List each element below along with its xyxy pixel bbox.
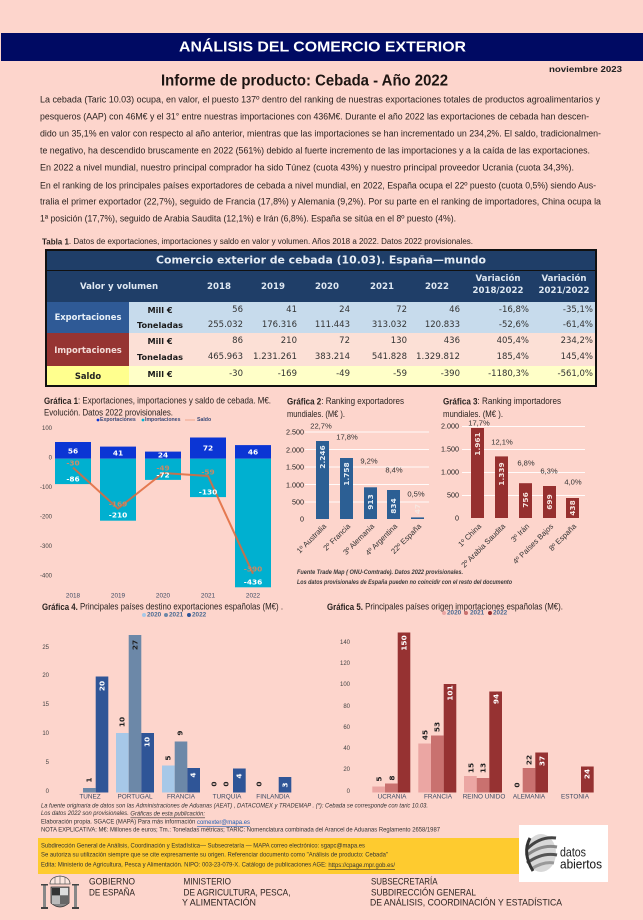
chart 5 categories: ALEMANIA: [513, 794, 546, 800]
ministry label: MINISTERIO: [184, 876, 231, 888]
chart 3 y axis: [441, 422, 459, 522]
footnotes: Los datos 2022 son provisionales. Gráficas de esta publicación:: [41, 810, 205, 817]
chart 1 balance values: -169: [109, 500, 127, 508]
chart 4 y axis: 20: [42, 673, 50, 679]
chart 5 values: 13: [478, 763, 488, 773]
chart 2 categories: 2º Francia: [321, 521, 353, 553]
chart 3 y axis: 1.500: [441, 444, 459, 454]
chart 3 values: 756: [521, 492, 530, 508]
row group: exportaciones: Exportaciones: [55, 312, 121, 322]
chart 5 legend: 2021: [470, 610, 485, 616]
government label: [89, 876, 135, 898]
chart 1 bar values: [66, 444, 262, 586]
chart 4 y axis: 0: [46, 789, 50, 795]
shield: [51, 887, 69, 907]
table header row: 2021/2022: [539, 286, 590, 296]
table header row: 2019: [261, 282, 285, 292]
chart 5 y axis: 0: [347, 789, 351, 795]
chart 3 grid: [462, 426, 585, 496]
chart 3 y axis: 0: [455, 514, 459, 522]
chart 4 bars: [83, 635, 291, 792]
chart 1 balance values: -390: [244, 564, 262, 574]
undersecretariat label: SUBSECRETARÍA: [371, 876, 438, 888]
chart 1 bar values: 56: [68, 446, 78, 456]
chart 2 y axis: 1.000: [286, 480, 304, 490]
chart 5 values: 0: [512, 782, 522, 788]
chart 2 values: 47: [413, 504, 422, 514]
chart 1 legend: Saldo: [197, 417, 211, 423]
row group: importaciones: 405,4%: [497, 336, 529, 346]
chart 1 categories: [66, 592, 261, 600]
chart 1 balance values: [66, 458, 262, 574]
chart 2 y axis: 500: [292, 498, 304, 506]
intro text block: En 2022 a nivel mundial, nuestro principal comprador ha sido Túnez (cuota 43%) y nuestro principal proveedor Ucrania (cuota 34,3%).: [40, 162, 574, 174]
chart 1 balance line: [73, 468, 253, 574]
chart 4 values: 20: [98, 681, 106, 691]
chart 4 values: 0: [222, 781, 230, 787]
chart 5 legend: 2022: [493, 610, 508, 616]
chart 4 values: 10: [142, 737, 152, 747]
chart 3 bars: [471, 428, 579, 518]
chart 3 values: 1.339: [497, 462, 506, 486]
source note: [297, 570, 512, 586]
chart 5 values: [374, 635, 592, 788]
table header row: Variación: [475, 273, 521, 284]
chart 2 shares: 8,4%: [385, 466, 403, 474]
chart 1 bar values: -86: [66, 474, 80, 484]
government label: DE ESPAÑA: [89, 888, 135, 898]
source note: Fuente Trade Map ( ONU-Comtrade). Datos 2022 provisionales.: [297, 570, 463, 576]
chart 1 categories: 2019: [111, 592, 126, 600]
icon: datos abiertos logo: [519, 825, 608, 882]
undersecretariat label: SUBDIRECCIÓN GENERAL: [371, 888, 477, 898]
chart 5 values: 24: [582, 769, 592, 779]
yellow credits box: Subdirección General de Análisis, Coordinación y Estadística— Subsecretaría — MAPA correo electrónico: sgapc@mapa.es: [41, 842, 365, 850]
chart 4 categories: FRANCIA: [167, 794, 196, 800]
chart 4 legend: [142, 612, 207, 618]
chart 2 categories: 1º Australia: [295, 521, 329, 555]
chart 1 bar values: -210: [109, 510, 127, 520]
chart 4 categories: TURQUIA: [213, 794, 242, 800]
row group: exportaciones: 56: [232, 305, 243, 315]
chart 2 shares: 17,8%: [336, 432, 358, 442]
chart 4 y axis: 15: [42, 702, 50, 708]
footnotes: NOTA EXPLICATIVA: M€: Millones de euros; Tm.: Toneladas métricas; TARIC: Nomenclatura combinada del Arancel de Aduanas Reglamento 2658/1987: [41, 826, 441, 834]
government label: GOBIERNO: [89, 876, 135, 888]
chart 3 y axis: 1.000: [441, 468, 459, 476]
chart 4: export destinations: [42, 612, 291, 800]
row group: importaciones: 130: [391, 336, 407, 346]
icon: datos abiertos logo: abiertos: [560, 856, 602, 872]
chart 2 values: 834: [389, 498, 398, 514]
chart 4 values: 4: [234, 773, 244, 779]
row group: exportaciones: [55, 305, 593, 330]
chart 3 categories: 4º Países Bajos: [511, 522, 555, 566]
table header row: [80, 273, 590, 296]
chart 1 bars: [55, 438, 271, 587]
intro text block: dido un 35,1% en valor con respecto al año anterior, mientras que las importaciones se han incrementado un 234,2%. El saldo, tradicionalmen-: [40, 128, 601, 140]
chart 4 values: 27: [130, 640, 140, 650]
chart 5 y axis: 100: [340, 682, 351, 688]
row group: importaciones: 234,2%: [561, 336, 593, 346]
yellow credits box: Se autoriza su utilización siempre que se cite expresamente su origen. Referenciar documento como "Análisis de producto: Cebada": [41, 852, 388, 858]
chart 5 values: 37: [538, 756, 546, 766]
source note: Los datos provisionales de España pueden no coincidir con el resto del documento: [297, 580, 512, 586]
chart 5 legend: 2020: [447, 610, 462, 616]
chart 1 bar values: -72: [156, 470, 170, 480]
row group: importaciones: 185,4%: [497, 352, 529, 362]
chart 5 y axis: 140: [340, 640, 351, 646]
chart 2 categories: 22º España: [389, 521, 424, 556]
chart 1 heading: Evolución. Datos 2022 provisionales.: [44, 406, 173, 418]
chart 1 y axis: -100: [40, 485, 53, 491]
chart 1 y axis: 0: [49, 456, 53, 462]
table: foreign trade: [45, 249, 597, 387]
chart 3 categories: 3º Irán: [509, 522, 531, 544]
chart 2 categories: [295, 521, 424, 557]
row group: saldo: -59: [393, 369, 407, 379]
footnotes: Elaboración propia. SGACE (MAPA) Para más información comexter@mapa.es: [41, 818, 250, 826]
chart 2 bars: [316, 441, 424, 519]
chart 1 balance values: -59: [201, 468, 215, 476]
table caption: Tabla 1. Datos de exportaciones, importaciones y saldo en valor y volumen. Años 2018 a 2022. Datos 2022 provisionales.: [42, 237, 473, 246]
chart 4 y axis: 10: [42, 731, 50, 737]
row group: exportaciones: Mill €: [147, 305, 173, 315]
table header row: 2021: [370, 282, 394, 292]
chart 2 values: [318, 445, 422, 514]
chart 5 values: 15: [466, 763, 476, 773]
chart 5 y axis: 20: [343, 767, 351, 773]
chart 2 heading: Gráfica 2: Ranking exportadores: [287, 395, 404, 406]
chart 3 values: 1.961: [473, 432, 482, 456]
chart 5 values: 53: [432, 722, 442, 732]
row group: importaciones: 465.963: [208, 352, 243, 362]
chart 1 bar values: -130: [199, 488, 217, 496]
row group: saldo: -169: [278, 369, 297, 379]
intro text block: te negativo, ha descendido bruscamente en 2022 (561%) debido al fuerte incremento de las importaciones y a la caída de las exportaciones.: [40, 146, 590, 156]
yellow credits box: Edita: Ministerio de Agricultura, Pesca y Alimentación. NIPO: 003-23-079-X. Catálogo de publicaciones AGE: https://cpage.mpr.gob.es/: [41, 862, 395, 868]
chart 3 shares: 4,0%: [564, 478, 582, 486]
table header row: Valor y volumen: [80, 282, 158, 292]
chart 4 values: 1: [84, 777, 94, 783]
chart 5 values: 150: [400, 635, 408, 651]
chart 5 y axis: 60: [343, 725, 351, 731]
chart 4 values: [84, 640, 290, 788]
row group: importaciones: 1.231.261: [253, 352, 297, 362]
row group: exportaciones: -16,8%: [499, 305, 529, 315]
chart 1 y axis: -300: [40, 544, 53, 550]
chart 2 values: 2.246: [318, 445, 327, 469]
chart 5 y axis: 40: [343, 746, 351, 752]
chart 1 y axis: [40, 426, 53, 580]
intro text block: 1ª posición (17,7%), seguido de Arabia Saudita (12,1%) e Irán (6,8%). España se sitúa en el 8º puesto (4%).: [40, 214, 456, 224]
row group: saldo: -1180,3%: [488, 369, 529, 379]
footnotes: La fuente originaria de datos son las Administraciones de Aduanas (AEAT) , DATACOMEX y TRADEMAP . (*): Cebada se corresponde con taric 10.03.: [41, 802, 428, 810]
row group: exportaciones: 46: [449, 305, 460, 315]
header band: [1, 33, 643, 61]
chart 4 values: 0: [210, 781, 218, 787]
icon: datos abiertos logo: datos: [560, 844, 586, 860]
chart 1 bar values: 46: [248, 448, 258, 456]
chart 1 legend: Importaciones: [145, 417, 181, 423]
chart 1 balance values: -30: [66, 458, 80, 468]
chart 5 values: 94: [492, 694, 500, 704]
chart 1 bar values: 24: [158, 450, 168, 460]
chart 1 categories: 2020: [156, 592, 171, 600]
chart 4 legend: 2020: [147, 612, 162, 618]
row group: saldo: Saldo: [75, 371, 101, 381]
row group: importaciones: 436: [444, 336, 460, 346]
chart 1: exports, imports and balance: [40, 417, 271, 600]
chart 5 y axis: [340, 640, 351, 795]
chart 5 values: 22: [524, 755, 534, 765]
row group: saldo: Mill €: [147, 369, 173, 379]
chart 1 y axis: -200: [40, 515, 53, 521]
chart 2 heading: [287, 395, 404, 419]
chart 3 shares: 6,8%: [517, 458, 535, 468]
chart 2 y axis: [286, 428, 304, 524]
table title: Comercio exterior de cebada (10.03). España—mundo: [156, 254, 486, 266]
chart 3 values: 699: [545, 494, 554, 510]
table header row: Variación: [541, 273, 587, 284]
row group: importaciones: 210: [281, 336, 297, 346]
chart 5 categories: UCRANIA: [378, 794, 407, 800]
row group: saldo: -49: [336, 369, 350, 379]
chart 3 categories: [456, 521, 579, 570]
chart 3 categories: 2º Arabia Saudita: [459, 521, 508, 570]
chart 1 balance values: -49: [156, 464, 170, 472]
chart 1 legend: Exportaciones: [100, 417, 136, 423]
chart 4 values: 4: [188, 772, 198, 778]
chart 3 heading: Gráfica 3: Ranking importadores: [443, 395, 561, 406]
chart 1 bar values: 41: [113, 448, 123, 458]
chart 5 values: 45: [420, 730, 430, 740]
row group: exportaciones: -61,4%: [563, 320, 593, 330]
chart 5 values: 101: [446, 685, 454, 701]
chart 4 categories: FINLANDIA: [256, 794, 290, 800]
intro text block: [40, 94, 602, 224]
chart 5 heading: Gráfica 5. Principales países origen importaciones españolas (M€).: [327, 600, 563, 612]
chart 2 categories: 4º Argentina: [364, 521, 400, 557]
intro text block: tralia el primer exportador (22,7%), seguido de Francia (17,8%) y Alemania (9,2%). Por su parte en el ranking de importadores, China ocupa la: [40, 196, 602, 208]
chart 2 y axis: 2.000: [286, 446, 304, 454]
chart 2 values: 1.758: [342, 462, 351, 486]
icon: globe: [526, 834, 557, 872]
chart 4 legend: 2021: [169, 612, 184, 618]
yellow credits box: [38, 838, 520, 874]
ministry label: Y ALIMENTACIÓN: [182, 898, 256, 908]
row group: exportaciones: -52,6%: [499, 320, 529, 330]
chart 2 y axis: 2.500: [286, 428, 304, 436]
chart 1 bar values: 72: [203, 444, 213, 452]
chart 4 values: 3: [280, 782, 290, 788]
header band: ANÁLISIS DEL COMERCIO EXTERIOR: [179, 38, 466, 56]
chart 3 shares: 12,1%: [491, 438, 513, 446]
report title: Informe de producto: Cebada - Año 2022: [161, 72, 448, 90]
row group: saldo: -390: [441, 369, 460, 379]
row group: exportaciones: Toneladas: [137, 320, 183, 330]
chart 1 heading: Gráfica 1: Exportaciones, importaciones y saldo de cebada. M€.: [44, 394, 271, 406]
chart 5 legend: [442, 610, 508, 616]
icon: coat of arms of Spain: [41, 876, 79, 909]
undersecretariat label: [370, 876, 563, 908]
chart 3 categories: 8º España: [547, 521, 579, 553]
chart 3 values: 438: [568, 500, 577, 516]
chart 1 categories: 2018: [66, 592, 81, 600]
row group: exportaciones: 313.032: [372, 320, 407, 330]
row group: importaciones: 1.329.812: [416, 352, 460, 362]
chart 5 categories: [378, 794, 590, 800]
chart 4 values: 10: [118, 717, 126, 727]
table header row: 2018/2022: [473, 286, 524, 296]
row group: importaciones: 86: [232, 336, 243, 346]
chart 4 y axis: 25: [42, 645, 50, 651]
chart 2 grid: [305, 432, 429, 502]
row group: importaciones: Toneladas: [137, 352, 183, 362]
chart 3 shares: 6,3%: [540, 466, 558, 476]
chart 4 values: 9: [176, 730, 184, 736]
row group: importaciones: Importaciones: [54, 345, 122, 355]
chart 5: import origins: [340, 610, 594, 800]
chart 4 values: 0: [254, 781, 264, 787]
chart 3 shares: [468, 418, 582, 486]
row group: exportaciones: 72: [396, 305, 407, 315]
row group: saldo: -30: [229, 369, 243, 379]
row group: importaciones: 541.828: [372, 352, 407, 362]
chart 3: world importers ranking: [441, 418, 585, 570]
undersecretariat label: DE ANÁLISIS, COORDINACIÓN Y ESTADÍSTICA: [370, 898, 563, 908]
chart 1 categories: 2021: [201, 592, 216, 600]
row group: exportaciones: 176.316: [262, 320, 297, 330]
row group: exportaciones: -35,1%: [563, 305, 593, 315]
chart 4 legend: 2022: [192, 612, 207, 618]
crown: [50, 876, 70, 884]
chart 2 shares: [310, 422, 425, 498]
chart 4 heading: Gráfica 4. Principales países destino exportaciones españolas (M€) .: [42, 600, 283, 612]
chart 1 legend: [97, 417, 211, 423]
intro text block: pesqueros (AAP) con 46M€ y el 31° entre nuestras importaciones con 436M€. Durante el año 2022 las exportaciones de cebada han descen-: [40, 112, 589, 122]
chart 5 values: 5: [374, 776, 384, 782]
chart 3 shares: 17,7%: [468, 418, 490, 428]
row group: importaciones: [54, 336, 593, 362]
chart 5 categories: ESTONIA: [561, 794, 590, 800]
intro text block: En el ranking de los principales países exportadores de cebada a nivel mundial, en 2022, España ocupa el 22º puesto (cuota 0,5%) siendo Aus-: [40, 180, 596, 192]
row group: importaciones: 145,4%: [561, 352, 593, 362]
table header row: 2020: [315, 282, 339, 292]
chart 1 bar values: -436: [244, 578, 262, 586]
table header row: 2018: [207, 282, 231, 292]
chart 5 y axis: 120: [340, 661, 351, 667]
chart 2 shares: 9,2%: [360, 456, 378, 466]
chart 1 y axis: -400: [40, 574, 53, 580]
row group: importaciones: 383.214: [315, 352, 350, 362]
chart 3 heading: [443, 395, 561, 419]
row group: exportaciones: 111.443: [315, 320, 350, 330]
chart 3 values: [473, 432, 577, 516]
chart 2 categories: 3º Alemania: [341, 521, 377, 557]
chart 2 heading: mundiales. (M€ ).: [287, 408, 345, 419]
chart 3 y axis: 500: [447, 490, 459, 500]
chart 4 y axis: 5: [46, 760, 50, 766]
chart 4 categories: [79, 794, 290, 800]
chart 4 categories: TUNEZ: [79, 794, 101, 800]
footnotes: [41, 802, 441, 834]
row group: saldo: -561,0%: [558, 369, 593, 379]
chart 2 y axis: 0: [300, 514, 304, 524]
chart 5 y axis: 80: [343, 704, 351, 710]
date: noviembre 2023: [549, 64, 622, 74]
row group: importaciones: Mill €: [147, 336, 173, 346]
row group: exportaciones: 41: [286, 305, 297, 315]
chart 3 y axis: 2.000: [441, 422, 459, 430]
chart 3 heading: mundiales. (M€ ).: [443, 408, 503, 419]
chart 5 categories: REINO UNIDO: [463, 794, 505, 800]
intro text block: La cebada (Taric 10.03) ocupa, en valor, el puesto 137º dentro del ranking de nuestras exportaciones totales de productos agroalimentarios y: [40, 94, 600, 106]
row group: saldo: [75, 369, 593, 381]
chart 2 shares: 0,5%: [407, 490, 425, 498]
ministry label: DE AGRICULTURA, PESCA,: [184, 888, 290, 898]
chart 1 y axis: 100: [42, 426, 53, 432]
row group: exportaciones: 255.032: [208, 320, 243, 330]
chart 1 heading: [44, 394, 271, 418]
row group: exportaciones: 24: [339, 305, 350, 315]
chart 1 categories: 2022: [246, 592, 261, 600]
chart 4 y axis: [42, 645, 50, 795]
row group: importaciones: 72: [339, 336, 350, 346]
chart 2 values: 913: [366, 494, 375, 510]
chart 2: world exporters ranking: [286, 422, 429, 557]
table header row: 2022: [425, 282, 449, 292]
ministry label: [182, 876, 290, 908]
chart 5 values: 8: [388, 775, 396, 781]
row group: exportaciones: 120.833: [425, 320, 460, 330]
chart 3 categories: 1º China: [456, 521, 484, 549]
chart 4 values: 5: [164, 755, 172, 761]
chart 2 shares: 22,7%: [310, 422, 332, 430]
chart 4 categories: PORTUGAL: [117, 794, 153, 800]
pillars: [43, 885, 46, 908]
chart 5 bars: [372, 632, 594, 792]
chart 5 categories: FRANCIA: [424, 794, 453, 800]
chart 2 y axis: 1.500: [286, 462, 304, 472]
